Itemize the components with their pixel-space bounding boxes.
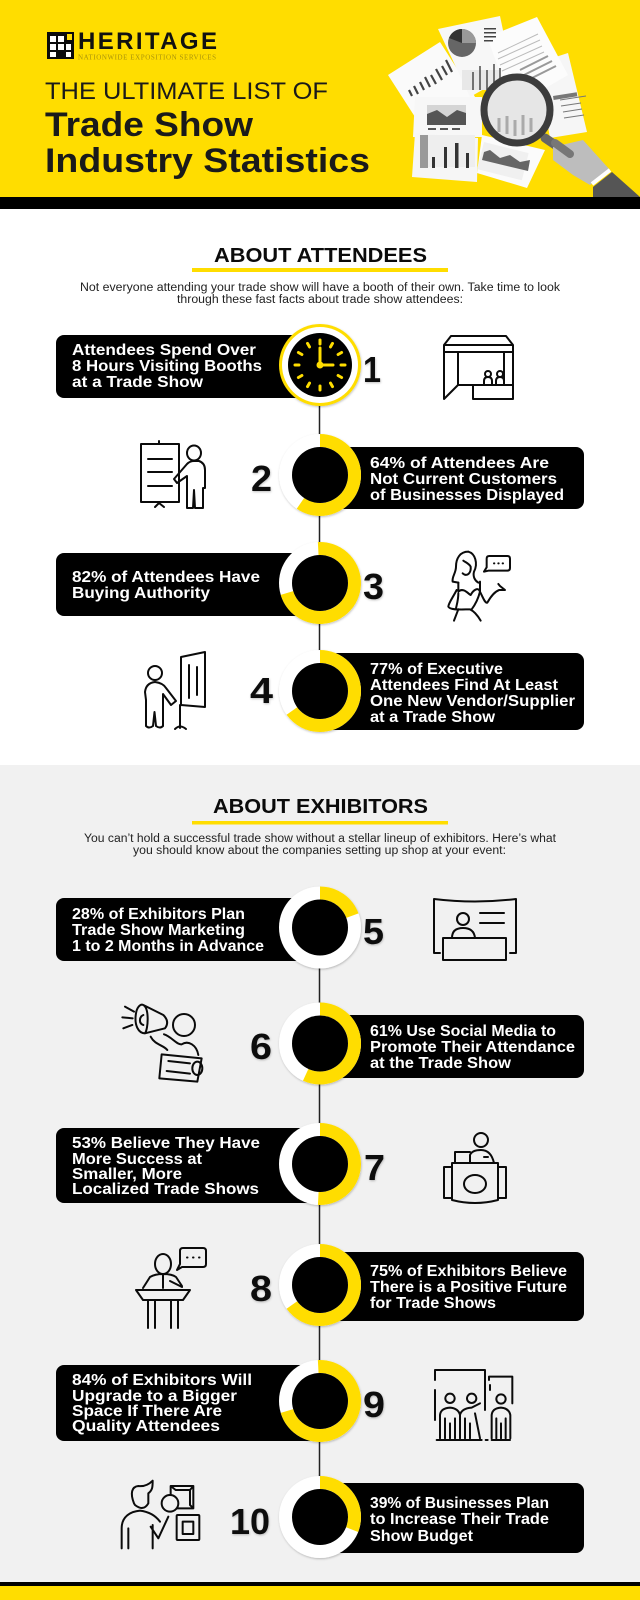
stat 10 ring chart	[279, 1476, 361, 1558]
stat 2 text	[370, 455, 564, 504]
title: Industry Statistics	[45, 142, 370, 180]
timeline connector: attendees	[318, 365, 320, 691]
stat 4 text: One New Vendor/Supplier	[370, 693, 575, 710]
stat 8	[136, 1244, 584, 1328]
icon: person inspecting frames with magnifier	[122, 1481, 199, 1548]
title	[45, 78, 370, 180]
stat 1 text	[72, 342, 262, 391]
stat 2 text: Not Current Customers	[370, 471, 557, 488]
intro text: attendees: Not everyone attending your trade show will have a booth of their own. Take time to look	[80, 282, 560, 294]
stat 5 ring chart	[279, 886, 361, 968]
stat 7 text	[72, 1135, 260, 1198]
icon: presenter with board	[141, 441, 205, 508]
icon: attendees in front of booths	[435, 1370, 512, 1440]
stat 1	[56, 324, 513, 406]
stat 6	[122, 1002, 584, 1084]
stat 8 text: 75% of Exhibitors Believe	[370, 1263, 567, 1280]
number 8: 8	[250, 1268, 272, 1309]
stat 6 ring chart	[279, 1002, 361, 1084]
stat 4 text: at a Trade Show	[370, 709, 496, 726]
title: THE ULTIMATE LIST OF	[45, 78, 328, 105]
stat 9 text: Space If There Are	[72, 1403, 222, 1420]
stat 10	[122, 1476, 584, 1558]
stat 7 ring chart	[279, 1123, 361, 1205]
stat 7 text: Localized Trade Shows	[72, 1181, 259, 1198]
stat 7 text: More Success at	[72, 1151, 202, 1168]
stat 2	[141, 434, 584, 516]
stat 3 text: 82% of Attendees Have	[72, 569, 260, 586]
stat 8 text: for Trade Shows	[370, 1295, 496, 1312]
icon: person beside banner	[145, 652, 205, 729]
icon: person with megaphone	[122, 1005, 202, 1082]
intro text: attendees: through these fast facts about trade show attendees:	[177, 294, 463, 306]
illustration: papers, charts and magnifying glass	[388, 16, 640, 197]
stat 8 text: There is a Positive Future	[370, 1279, 567, 1296]
stat 1 text: 8 Hours Visiting Booths	[72, 358, 262, 375]
stat 8 text	[370, 1263, 567, 1312]
stat 1 text: Attendees Spend Over	[72, 342, 256, 359]
heading: about exhibitors	[192, 795, 448, 824]
magnifying glass	[484, 77, 640, 197]
stat 6 text: at the Trade Show	[370, 1055, 512, 1072]
footer band	[0, 1582, 640, 1600]
number 5: 5	[363, 911, 384, 952]
heading: about attendees: ABOUT ATTENDEES	[214, 244, 427, 267]
icon: exhibitor at desk with screen	[434, 899, 516, 960]
stat 4	[145, 650, 584, 732]
stat 9 text	[72, 1372, 252, 1435]
stat 3	[56, 542, 510, 624]
number 6: 6	[250, 1026, 272, 1067]
logo: NATIONWIDE EXPOSITION SERVICES	[78, 54, 216, 62]
stat 5 text: 1 to 2 Months in Advance	[72, 938, 264, 955]
stat 8 ring chart	[279, 1244, 361, 1326]
stat 5	[56, 886, 516, 968]
stat 9 text: Upgrade to a Bigger	[72, 1388, 237, 1405]
number 2: 2	[251, 458, 272, 499]
logo	[47, 28, 217, 62]
stat 10 text: to Increase Their Trade	[370, 1511, 549, 1528]
number 4: 4	[250, 670, 273, 711]
stat 6 text	[370, 1023, 575, 1072]
stat 7	[56, 1123, 506, 1205]
logo: HERITAGE	[78, 28, 217, 55]
stat 2 ring chart	[279, 434, 361, 516]
stat 2 text: of Businesses Displayed	[370, 487, 564, 504]
stat 7 text: Smaller, More	[72, 1166, 182, 1183]
stat 6 text: 61% Use Social Media to	[370, 1023, 556, 1040]
panel: exhibitors background	[0, 765, 640, 1582]
stat 6 text: Promote Their Attendance	[370, 1039, 575, 1056]
stat 5 text: 28% of Exhibitors Plan	[72, 906, 245, 923]
icon: speaker at lectern	[136, 1248, 206, 1328]
stat 9	[56, 1360, 512, 1442]
title: Trade Show	[45, 106, 254, 144]
number 10: 10	[230, 1501, 270, 1542]
stat 9 text: Quality Attendees	[72, 1418, 220, 1435]
icon: booth	[444, 336, 513, 399]
stat 9 ring chart	[279, 1360, 361, 1442]
stat 1 text: at a Trade Show	[72, 374, 204, 391]
stat 3 text: Buying Authority	[72, 585, 210, 602]
intro text: exhibitors: you should know about the companies setting up shop at your event:	[133, 845, 506, 857]
icon: exhibitor behind round-logo counter	[444, 1133, 506, 1203]
number 9: 9	[363, 1384, 385, 1425]
icon: clock	[279, 324, 361, 406]
stat 5 text	[72, 906, 264, 955]
stat 9 text: 84% of Exhibitors Will	[72, 1372, 252, 1389]
stat 7 text: 53% Believe They Have	[72, 1135, 260, 1152]
heading: about attendees	[192, 244, 448, 272]
stat 3 ring chart	[279, 542, 361, 624]
stat 3 text	[72, 569, 260, 602]
number 1: 1	[363, 349, 381, 390]
heading: about exhibitors: ABOUT EXHIBITORS	[213, 795, 428, 818]
stat 4 text	[370, 661, 575, 726]
stat 10 text	[370, 1495, 549, 1545]
icon: woman with speech bubble	[448, 552, 510, 621]
stat 10 text: 39% of Businesses Plan	[370, 1495, 549, 1512]
stat 10 text: Show Budget	[370, 1528, 473, 1545]
stat 4 text: Attendees Find At Least	[370, 677, 558, 694]
stat 4 text: 77% of Executive	[370, 661, 503, 678]
timeline connector: exhibitors	[318, 928, 320, 1517]
intro text: exhibitors: You can’t hold a successful trade show without a stellar lineup of exhibitors. Here’s what	[84, 833, 557, 845]
intro text: exhibitors	[84, 833, 557, 857]
panel: header	[0, 0, 640, 209]
intro text: attendees	[80, 282, 560, 306]
number 7: 7	[364, 1147, 385, 1188]
stat 2 text: 64% of Attendees Are	[370, 455, 549, 472]
stat 4 ring chart	[279, 650, 361, 732]
number 3: 3	[363, 566, 384, 607]
stat 5 text: Trade Show Marketing	[72, 922, 245, 939]
